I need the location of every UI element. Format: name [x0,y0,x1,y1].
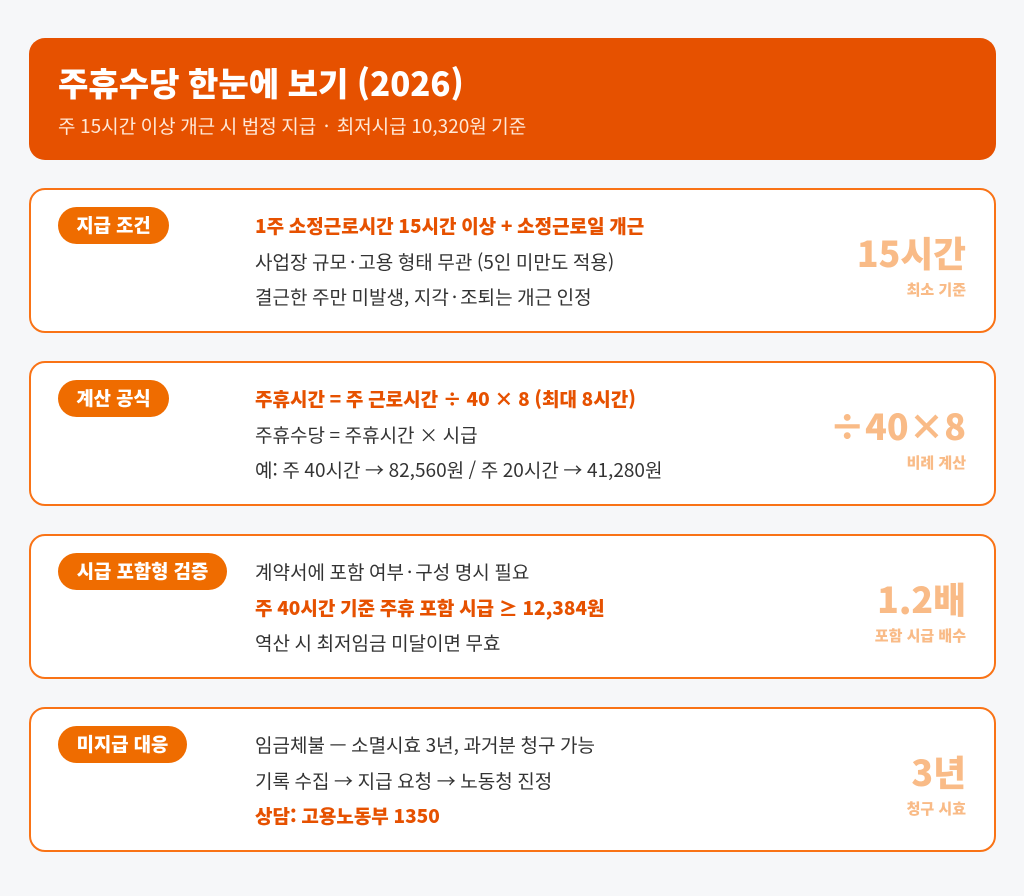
text line: steps: 기록 수집 → 지급 요청 → 노동청 진정 [255,767,552,794]
text line: statute: 임금체불 — 소멸시효 3년, 과거분 청구 가능 [255,731,595,758]
key figure: ÷40×8: ÷40×8 [829,400,966,451]
text line: example: 예: 주 40시간 → 82,560원 / 주 20시간 → 41,280원 [255,456,662,483]
highlighted formula: 주휴시간 = 주 근로시간 ÷ 40 × 8 (최대 8시간) [255,385,636,412]
text line: absence: 결근한 주만 미발생, 지각·조퇴는 개근 인정 [255,283,592,310]
key figure caption: 청구 시효 [907,798,966,819]
highlighted contact: 상담: 고용노동부 1350 [255,802,440,829]
badge: 미지급 대응: 미지급 대응 [77,730,168,756]
key figure: 3년: 3년 [911,746,966,797]
key figure: 1.2배: 1.2배 [877,573,966,624]
panel: 계산 공식 [29,361,996,506]
highlighted condition: 1주 소정근로시간 15시간 이상 + 소정근로일 개근 [255,212,644,239]
badge: 계산 공식 [58,380,169,417]
panel: 미지급 대응 [29,707,996,852]
text line: invalid: 역산 시 최저임금 미달이면 무효 [255,629,501,656]
panel: 시급 포함형 검증 [29,534,996,678]
text line: pay formula: 주휴수당 = 주휴시간 × 시급 [255,421,478,448]
text line: scope: 사업장 규모·고용 형태 무관 (5인 미만도 적용) [255,248,614,275]
badge: 시급 포함형 검증: 시급 포함형 검증 [77,556,208,584]
badge: 지급 조건 [58,206,169,244]
panel: 지급 조건 [29,188,996,332]
key figure caption: 최소 기준 [907,279,966,300]
header banner [29,38,996,160]
key figure caption: 포함 시급 배수 [875,625,966,646]
subtitle: 주 15시간 이상 개근 시 법정 지급 · 최저시급 10,320원 기준 [58,112,526,139]
badge: 미지급 대응 [58,726,187,763]
key figure caption: 비례 계산 [907,452,966,473]
key figure: 15시간: 15시간 [857,227,966,278]
text line: contract: 계약서에 포함 여부·구성 명시 필요 [255,558,529,585]
title: 주휴수당 한눈에 보기 (2026) [58,58,464,106]
highlighted threshold: 주 40시간 기준 주휴 포함 시급 ≥ 12,384원 [255,594,605,621]
badge: 지급 조건: 지급 조건 [76,210,151,238]
badge: 시급 포함형 검증 [58,552,227,590]
badge: 계산 공식: 계산 공식 [76,384,151,410]
